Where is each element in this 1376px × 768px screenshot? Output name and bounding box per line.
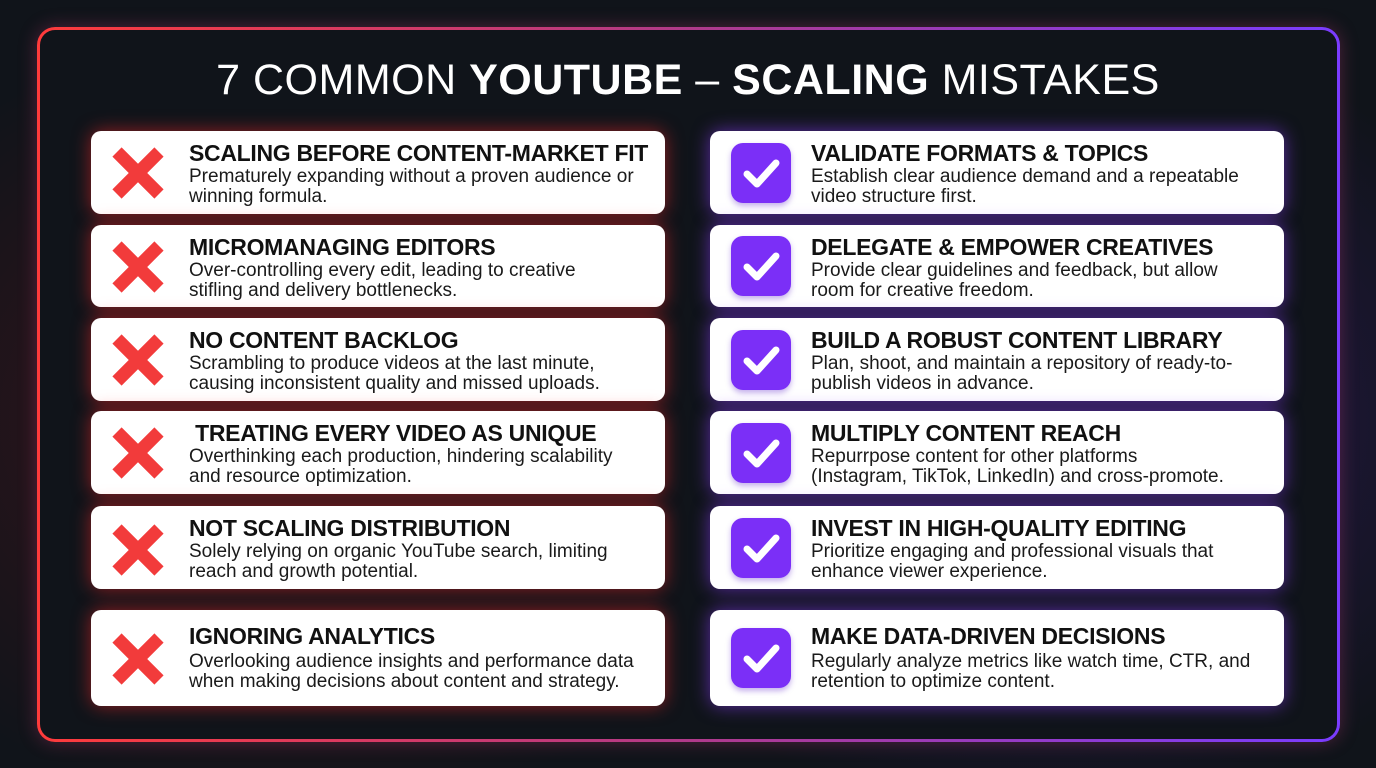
card: fix 1 bbox=[710, 131, 1284, 214]
card: fix 2: DELEGATE & EMPOWER CREATIVES bbox=[811, 234, 1213, 260]
card: fix 2: room for creative freedom. bbox=[811, 280, 1034, 301]
card: fix 3: Plan, shoot, and maintain a repository of ready-to- bbox=[811, 353, 1232, 374]
card: fix 1: VALIDATE FORMATS & TOPICS bbox=[811, 140, 1148, 166]
card: fix 5: Prioritize engaging and professional visuals that bbox=[811, 541, 1213, 562]
card: fix 3: BUILD A ROBUST CONTENT LIBRARY bbox=[811, 327, 1222, 353]
card: mistake 1: Prematurely expanding without a proven audience or bbox=[189, 166, 634, 187]
card: mistake 3: NO CONTENT BACKLOG bbox=[189, 327, 458, 353]
card: fix 6: Regularly analyze metrics like watch time, CTR, and bbox=[811, 651, 1250, 672]
card: mistake 2: stifling and delivery bottlenecks. bbox=[189, 280, 457, 301]
card: mistake 1 bbox=[91, 131, 665, 214]
card: mistake 2: MICROMANAGING EDITORS bbox=[189, 234, 495, 260]
card: fix 4: MULTIPLY CONTENT REACH bbox=[811, 420, 1121, 446]
card: fix 5 bbox=[710, 506, 1284, 589]
card: fix 5: INVEST IN HIGH-QUALITY EDITING bbox=[811, 515, 1186, 541]
card: mistake 5: NOT SCALING DISTRIBUTION bbox=[189, 515, 510, 541]
card: mistake 5 bbox=[91, 506, 665, 589]
card: fix 6: MAKE DATA-DRIVEN DECISIONS bbox=[811, 623, 1165, 649]
card: fix 1: Establish clear audience demand and a repeatable bbox=[811, 166, 1239, 187]
card: fix 6 bbox=[710, 610, 1284, 706]
card: mistake 4: Overthinking each production, hindering scalability bbox=[189, 446, 613, 467]
card: fix 5: enhance viewer experience. bbox=[811, 561, 1048, 582]
title: 7 COMMON YOUTUBE – SCALING MISTAKES bbox=[216, 56, 1160, 104]
card: mistake 6: Overlooking audience insights and performance data bbox=[189, 651, 634, 672]
card: mistake 4: TREATING EVERY VIDEO AS UNIQUE bbox=[195, 420, 596, 446]
card: mistake 1: SCALING BEFORE CONTENT-MARKET FIT bbox=[189, 140, 648, 166]
card: mistake 3: causing inconsistent quality and missed uploads. bbox=[189, 373, 600, 394]
card: mistake 4: and resource optimization. bbox=[189, 466, 412, 487]
card: mistake 5: reach and growth potential. bbox=[189, 561, 418, 582]
card: mistake 2: Over-controlling every edit, leading to creative bbox=[189, 260, 576, 281]
card: fix 6: retention to optimize content. bbox=[811, 671, 1055, 692]
card: mistake 6: when making decisions about content and strategy. bbox=[189, 671, 620, 692]
card: mistake 6: IGNORING ANALYTICS bbox=[189, 623, 435, 649]
card: fix 4 bbox=[710, 411, 1284, 494]
card: fix 3: publish videos in advance. bbox=[811, 373, 1034, 394]
card: mistake 5: Solely relying on organic YouTube search, limiting bbox=[189, 541, 608, 562]
card: fix 2 bbox=[710, 225, 1284, 307]
card: fix 4: (Instagram, TikTok, LinkedIn) and cross-promote. bbox=[811, 466, 1224, 487]
card: fix 1: video structure first. bbox=[811, 186, 977, 207]
card: fix 4: Repurrpose content for other platforms bbox=[811, 446, 1137, 467]
card: mistake 1: winning formula. bbox=[189, 186, 327, 207]
card: fix 2: Provide clear guidelines and feedback, but allow bbox=[811, 260, 1218, 281]
card: fix 3 bbox=[710, 318, 1284, 401]
card: mistake 2 bbox=[91, 225, 665, 307]
card: mistake 4 bbox=[91, 411, 665, 494]
card: mistake 3 bbox=[91, 318, 665, 401]
card: mistake 6 bbox=[91, 610, 665, 706]
card: mistake 3: Scrambling to produce videos at the last minute, bbox=[189, 353, 595, 374]
